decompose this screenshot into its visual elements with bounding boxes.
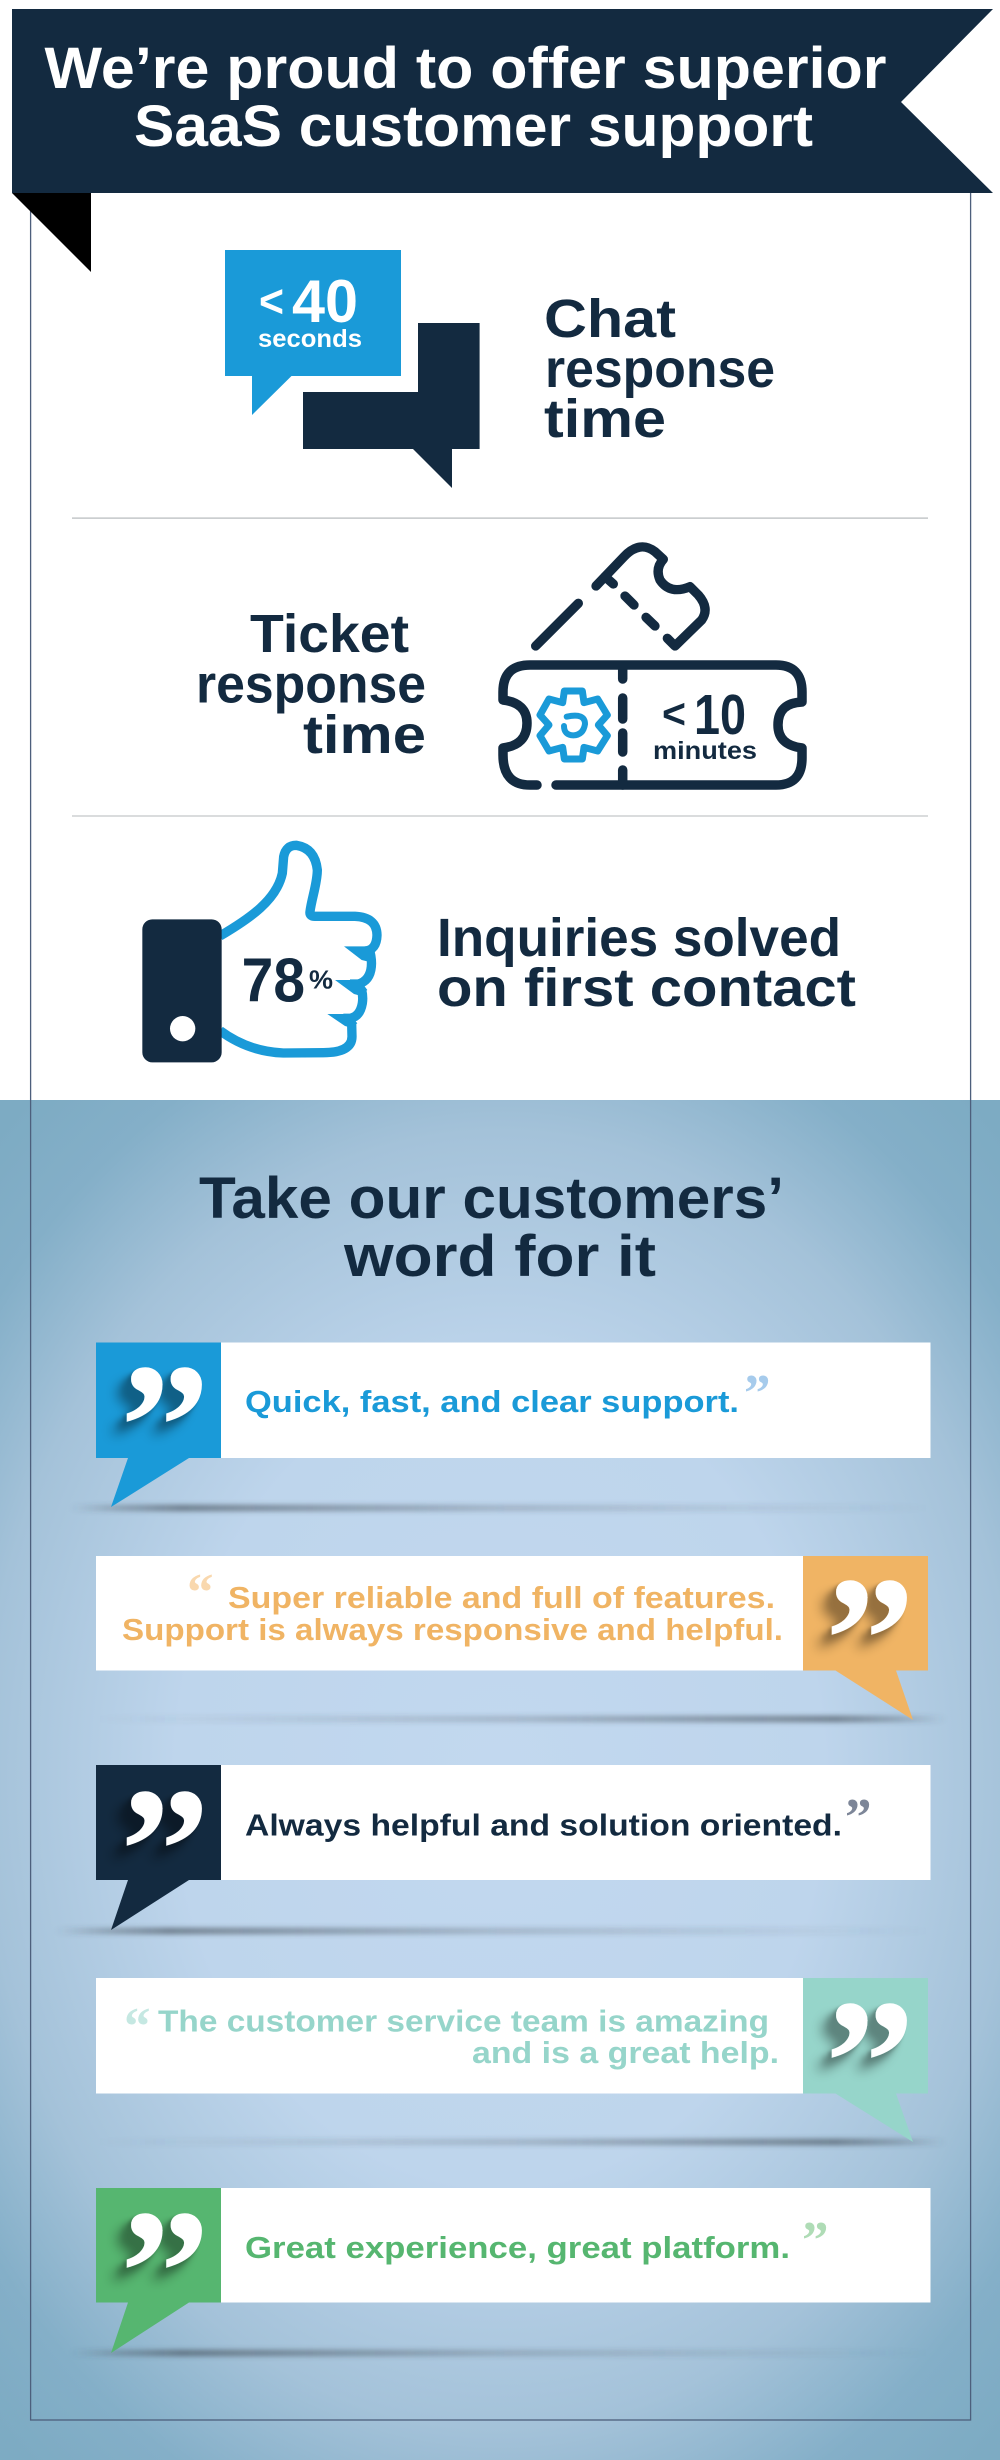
icon: thumbs up: [142, 845, 377, 1062]
opening mark: “: [124, 1998, 150, 2056]
icon: blue chat bubble with value: seconds: [258, 325, 362, 353]
icon: ticket: [503, 547, 802, 785]
panel: customer quotes background: [0, 1100, 1000, 2460]
closing mark: ”: [744, 1365, 770, 1423]
icon: quote mark: ”: [825, 1540, 915, 1739]
speech tab: [96, 2188, 221, 2353]
icon: gear: [540, 691, 607, 759]
speech tab: [96, 1342, 221, 1507]
quote text: Always helpful and solution oriented.: [245, 1808, 842, 1842]
icon: ticket: minutes: [653, 737, 757, 765]
speech tab: [803, 1978, 928, 2142]
heading: take our customers' word for it: [199, 1166, 784, 1289]
quote card: super reliable: [96, 1540, 946, 1739]
panel: chat response time: [225, 250, 775, 488]
quote text: and is a great help.: [472, 2035, 779, 2070]
title banner: [12, 9, 993, 272]
banner ribbon: [12, 9, 993, 193]
icon: ticket: 10: [694, 683, 746, 747]
icon: navy chat bubble: [303, 323, 480, 488]
banner fold: [12, 193, 91, 272]
icon: thumbs up: 78: [242, 947, 305, 1016]
quote card: quick, fast: [70, 1327, 930, 1526]
quote card: customer service team: [96, 1963, 946, 2162]
panel: ticket response time: [196, 547, 802, 785]
icon: blue chat bubble with value: [225, 250, 401, 415]
quote card: always helpful: [55, 1751, 930, 1950]
icon: ticket: <: [662, 690, 686, 737]
icon: quote mark: ”: [120, 2173, 210, 2372]
chat heading: response: [545, 339, 775, 399]
panel: inquiries solved: [142, 845, 856, 1062]
heading: take our customers' word for it: word for it: [343, 1224, 656, 1289]
ticket heading: [196, 604, 426, 765]
speech tab: [96, 1765, 221, 1930]
quote text: [158, 2004, 779, 2070]
closing mark: ”: [802, 2212, 828, 2270]
heading: take our customers' word for it: Take our customers’: [199, 1166, 784, 1231]
quote text: [122, 1580, 783, 1647]
inquiries heading: [437, 908, 856, 1018]
quote text: Super reliable and full of features.: [228, 1580, 775, 1615]
inquiries heading: Inquiries solved: [437, 908, 841, 968]
icon: thumbs up: %: [309, 964, 333, 994]
chat heading: [544, 289, 775, 449]
quote text: Quick, fast, and clear support.: [245, 1384, 739, 1419]
inquiries heading: on first contact: [437, 958, 856, 1018]
banner title: SaaS customer support: [134, 94, 813, 159]
ticket heading: Ticket: [250, 604, 409, 664]
banner title: [44, 36, 887, 159]
icon: blue chat bubble with value: <: [259, 275, 284, 327]
chat heading: Chat: [544, 289, 676, 349]
chat heading: time: [544, 389, 666, 449]
ticket heading: response: [196, 654, 426, 714]
closing mark: ”: [845, 1789, 872, 1847]
opening mark: “: [187, 1564, 214, 1622]
icon: quote mark: ”: [825, 1963, 915, 2162]
quote text: The customer service team is amazing: [158, 2004, 769, 2038]
quote text: Support is always responsive and helpful.: [122, 1612, 783, 1647]
quote text: Great experience, great platform.: [245, 2230, 790, 2265]
icon: blue chat bubble with value: 40: [292, 268, 358, 335]
icon: quote mark: ”: [120, 1751, 210, 1950]
speech tab: [803, 1556, 928, 1720]
icon: quote mark: ”: [120, 1327, 210, 1526]
banner title: We’re proud to offer superior: [44, 36, 887, 101]
ticket heading: time: [303, 705, 426, 765]
quote card: great experience: [70, 2173, 930, 2372]
